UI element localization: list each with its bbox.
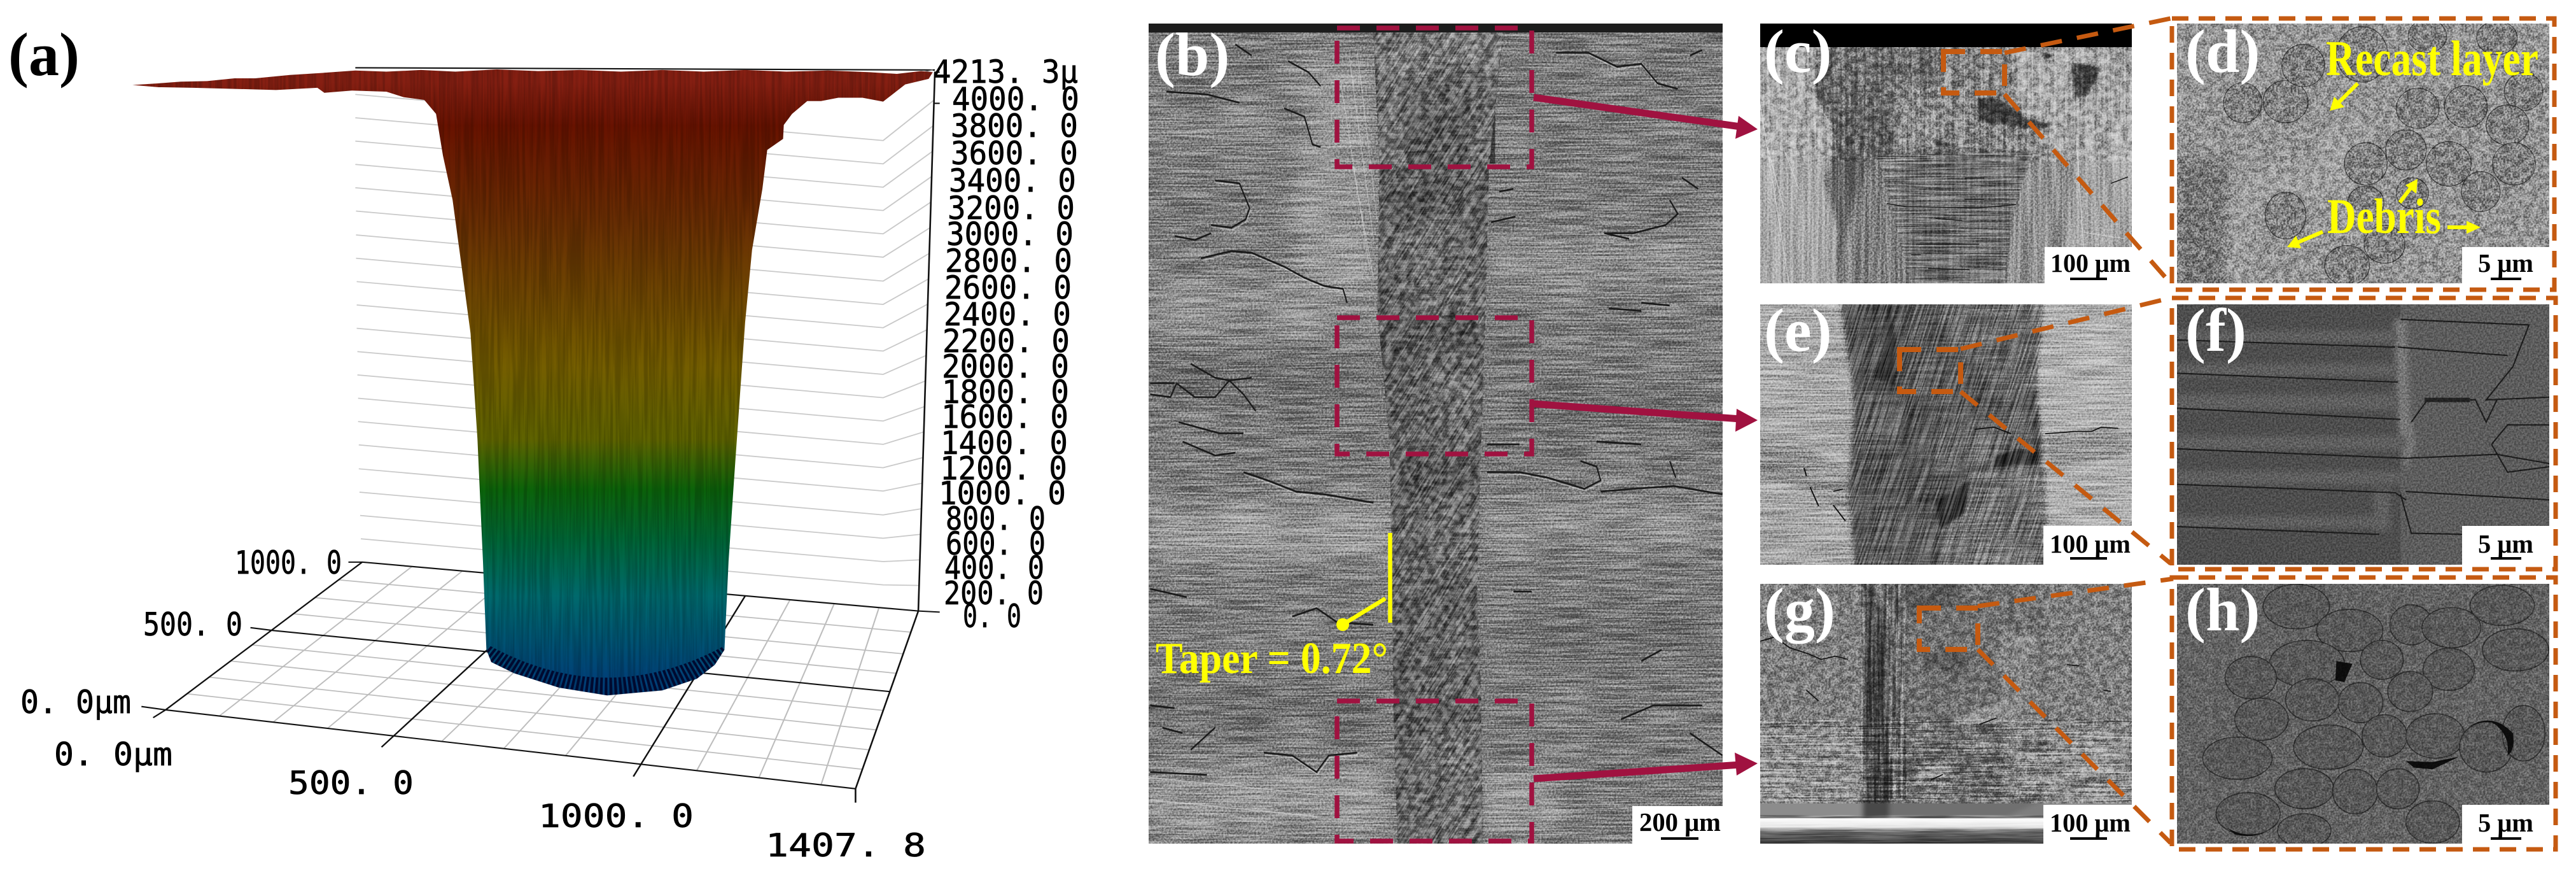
height axis labels: 3200. 0 bbox=[948, 190, 1075, 227]
SEM image c bbox=[1751, 24, 2143, 294]
panel label h: (h) bbox=[2185, 576, 2260, 644]
panel c: SEM top of hole bbox=[1760, 24, 2132, 283]
floor axis labels: 500. 0 bbox=[143, 606, 242, 643]
scale bar e: 100 μm bbox=[2050, 529, 2131, 558]
scale bar h: 5 μm bbox=[2478, 808, 2533, 837]
scale bar g: 100 μm bbox=[2050, 808, 2131, 837]
SEM image g bbox=[1751, 575, 2143, 847]
height axis labels: 3400. 0 bbox=[949, 162, 1076, 199]
height axis labels: 3800. 0 bbox=[951, 108, 1078, 145]
taper dot bbox=[1336, 618, 1349, 631]
height axis labels: 800. 0 bbox=[946, 500, 1046, 537]
panel label d: (d) bbox=[2185, 17, 2260, 85]
arrow from b to c bbox=[1534, 97, 1758, 139]
orange dashed frames around d f h bbox=[2172, 18, 2556, 849]
height axis labels bbox=[933, 53, 1079, 635]
scale bar h bbox=[2462, 805, 2549, 844]
inset box g bbox=[1919, 608, 1978, 649]
panel b: SEM overview of hole sidewall bbox=[1149, 20, 1723, 844]
panel label c: (c) bbox=[1764, 17, 1832, 85]
height axis labels: 2200. 0 bbox=[942, 323, 1070, 360]
height axis labels: 4213. 3μ bbox=[933, 53, 1078, 90]
panel label b: (b) bbox=[1155, 20, 1229, 89]
height axis labels: 3600. 0 bbox=[951, 135, 1078, 172]
scale bar e bbox=[2043, 526, 2132, 565]
yellow arrows bbox=[2287, 83, 2481, 248]
height axis labels: 3000. 0 bbox=[946, 216, 1074, 253]
orange zoom guide lines bbox=[1961, 18, 2173, 843]
arrow from b to e bbox=[1532, 404, 1758, 432]
height axis labels: 200. 0 bbox=[944, 575, 1044, 612]
floor axis labels: 500. 0 bbox=[288, 765, 414, 802]
panel a: 3D profile of the micro-hole bbox=[8, 20, 1079, 864]
floor axis labels bbox=[20, 544, 926, 864]
panel label f: (f) bbox=[2185, 296, 2246, 364]
height axis labels: 2800. 0 bbox=[945, 243, 1072, 280]
dark bottom fringe bbox=[483, 655, 731, 689]
scale bar f bbox=[2462, 526, 2549, 565]
panel e: SEM middle of hole bbox=[1760, 304, 2132, 565]
scale bar d: 5 μm bbox=[2478, 248, 2533, 278]
hole surface bbox=[127, 64, 948, 707]
arrow from b to g bbox=[1534, 753, 1758, 779]
height axis labels: 1600. 0 bbox=[941, 399, 1068, 436]
height axis labels: 600. 0 bbox=[946, 525, 1046, 562]
SEM image b bbox=[1149, 24, 1723, 844]
taper reference lines bbox=[1343, 533, 1390, 625]
height axis labels: 2600. 0 bbox=[944, 269, 1072, 306]
height axis labels: 0. 0 bbox=[963, 598, 1021, 635]
floor axis labels: 0. 0μm bbox=[54, 736, 172, 773]
taper annotation bbox=[1156, 533, 1390, 683]
panel label g: (g) bbox=[1764, 576, 1835, 644]
scale bar d bbox=[2462, 247, 2549, 283]
height axis labels: 1000. 0 bbox=[939, 475, 1066, 512]
panel g: SEM bottom of hole bbox=[1751, 575, 2143, 847]
height axis labels: 1200. 0 bbox=[940, 450, 1067, 487]
region boxes on panel b bbox=[1337, 28, 1532, 841]
height axis labels: 2000. 0 bbox=[942, 348, 1069, 385]
floor axis labels: 1000. 0 bbox=[538, 798, 694, 835]
floor axis labels: 0. 0μm bbox=[20, 684, 131, 721]
SEM image h bbox=[2177, 584, 2549, 847]
panel label a: (a) bbox=[8, 20, 80, 89]
floor axis labels: 1407. 8 bbox=[766, 827, 926, 864]
taper text: Taper = 0.72° bbox=[1156, 634, 1388, 683]
panel f: close-up of fibre sidewall bbox=[2177, 296, 2551, 565]
panel d: recast layer close-up bbox=[2177, 17, 2549, 289]
floor axis labels: 1000. 0 bbox=[235, 544, 342, 581]
SEM image e bbox=[1751, 295, 2143, 574]
height axis labels: 1800. 0 bbox=[942, 374, 1069, 411]
plot grid bbox=[141, 67, 940, 803]
scale bar b: 200 μm bbox=[1639, 807, 1721, 837]
panel h: close-up of fibres bbox=[2177, 576, 2549, 847]
height axis labels: 4000. 0 bbox=[952, 81, 1079, 118]
SEM image d bbox=[2177, 20, 2549, 289]
inset box c bbox=[1943, 52, 2005, 93]
inset box e bbox=[1900, 350, 1961, 392]
annotation debris: Debris bbox=[2327, 188, 2441, 244]
height axis labels: 1400. 0 bbox=[941, 425, 1068, 462]
3D plot bbox=[127, 64, 948, 803]
scale bar c: 100 μm bbox=[2050, 248, 2131, 278]
height axis labels: 400. 0 bbox=[944, 549, 1044, 586]
SEM image f bbox=[2177, 304, 2551, 565]
height axis labels: 2400. 0 bbox=[944, 296, 1071, 333]
panel label e: (e) bbox=[1764, 296, 1832, 364]
scale bar f: 5 μm bbox=[2478, 529, 2533, 558]
scale bar g bbox=[2043, 805, 2132, 844]
